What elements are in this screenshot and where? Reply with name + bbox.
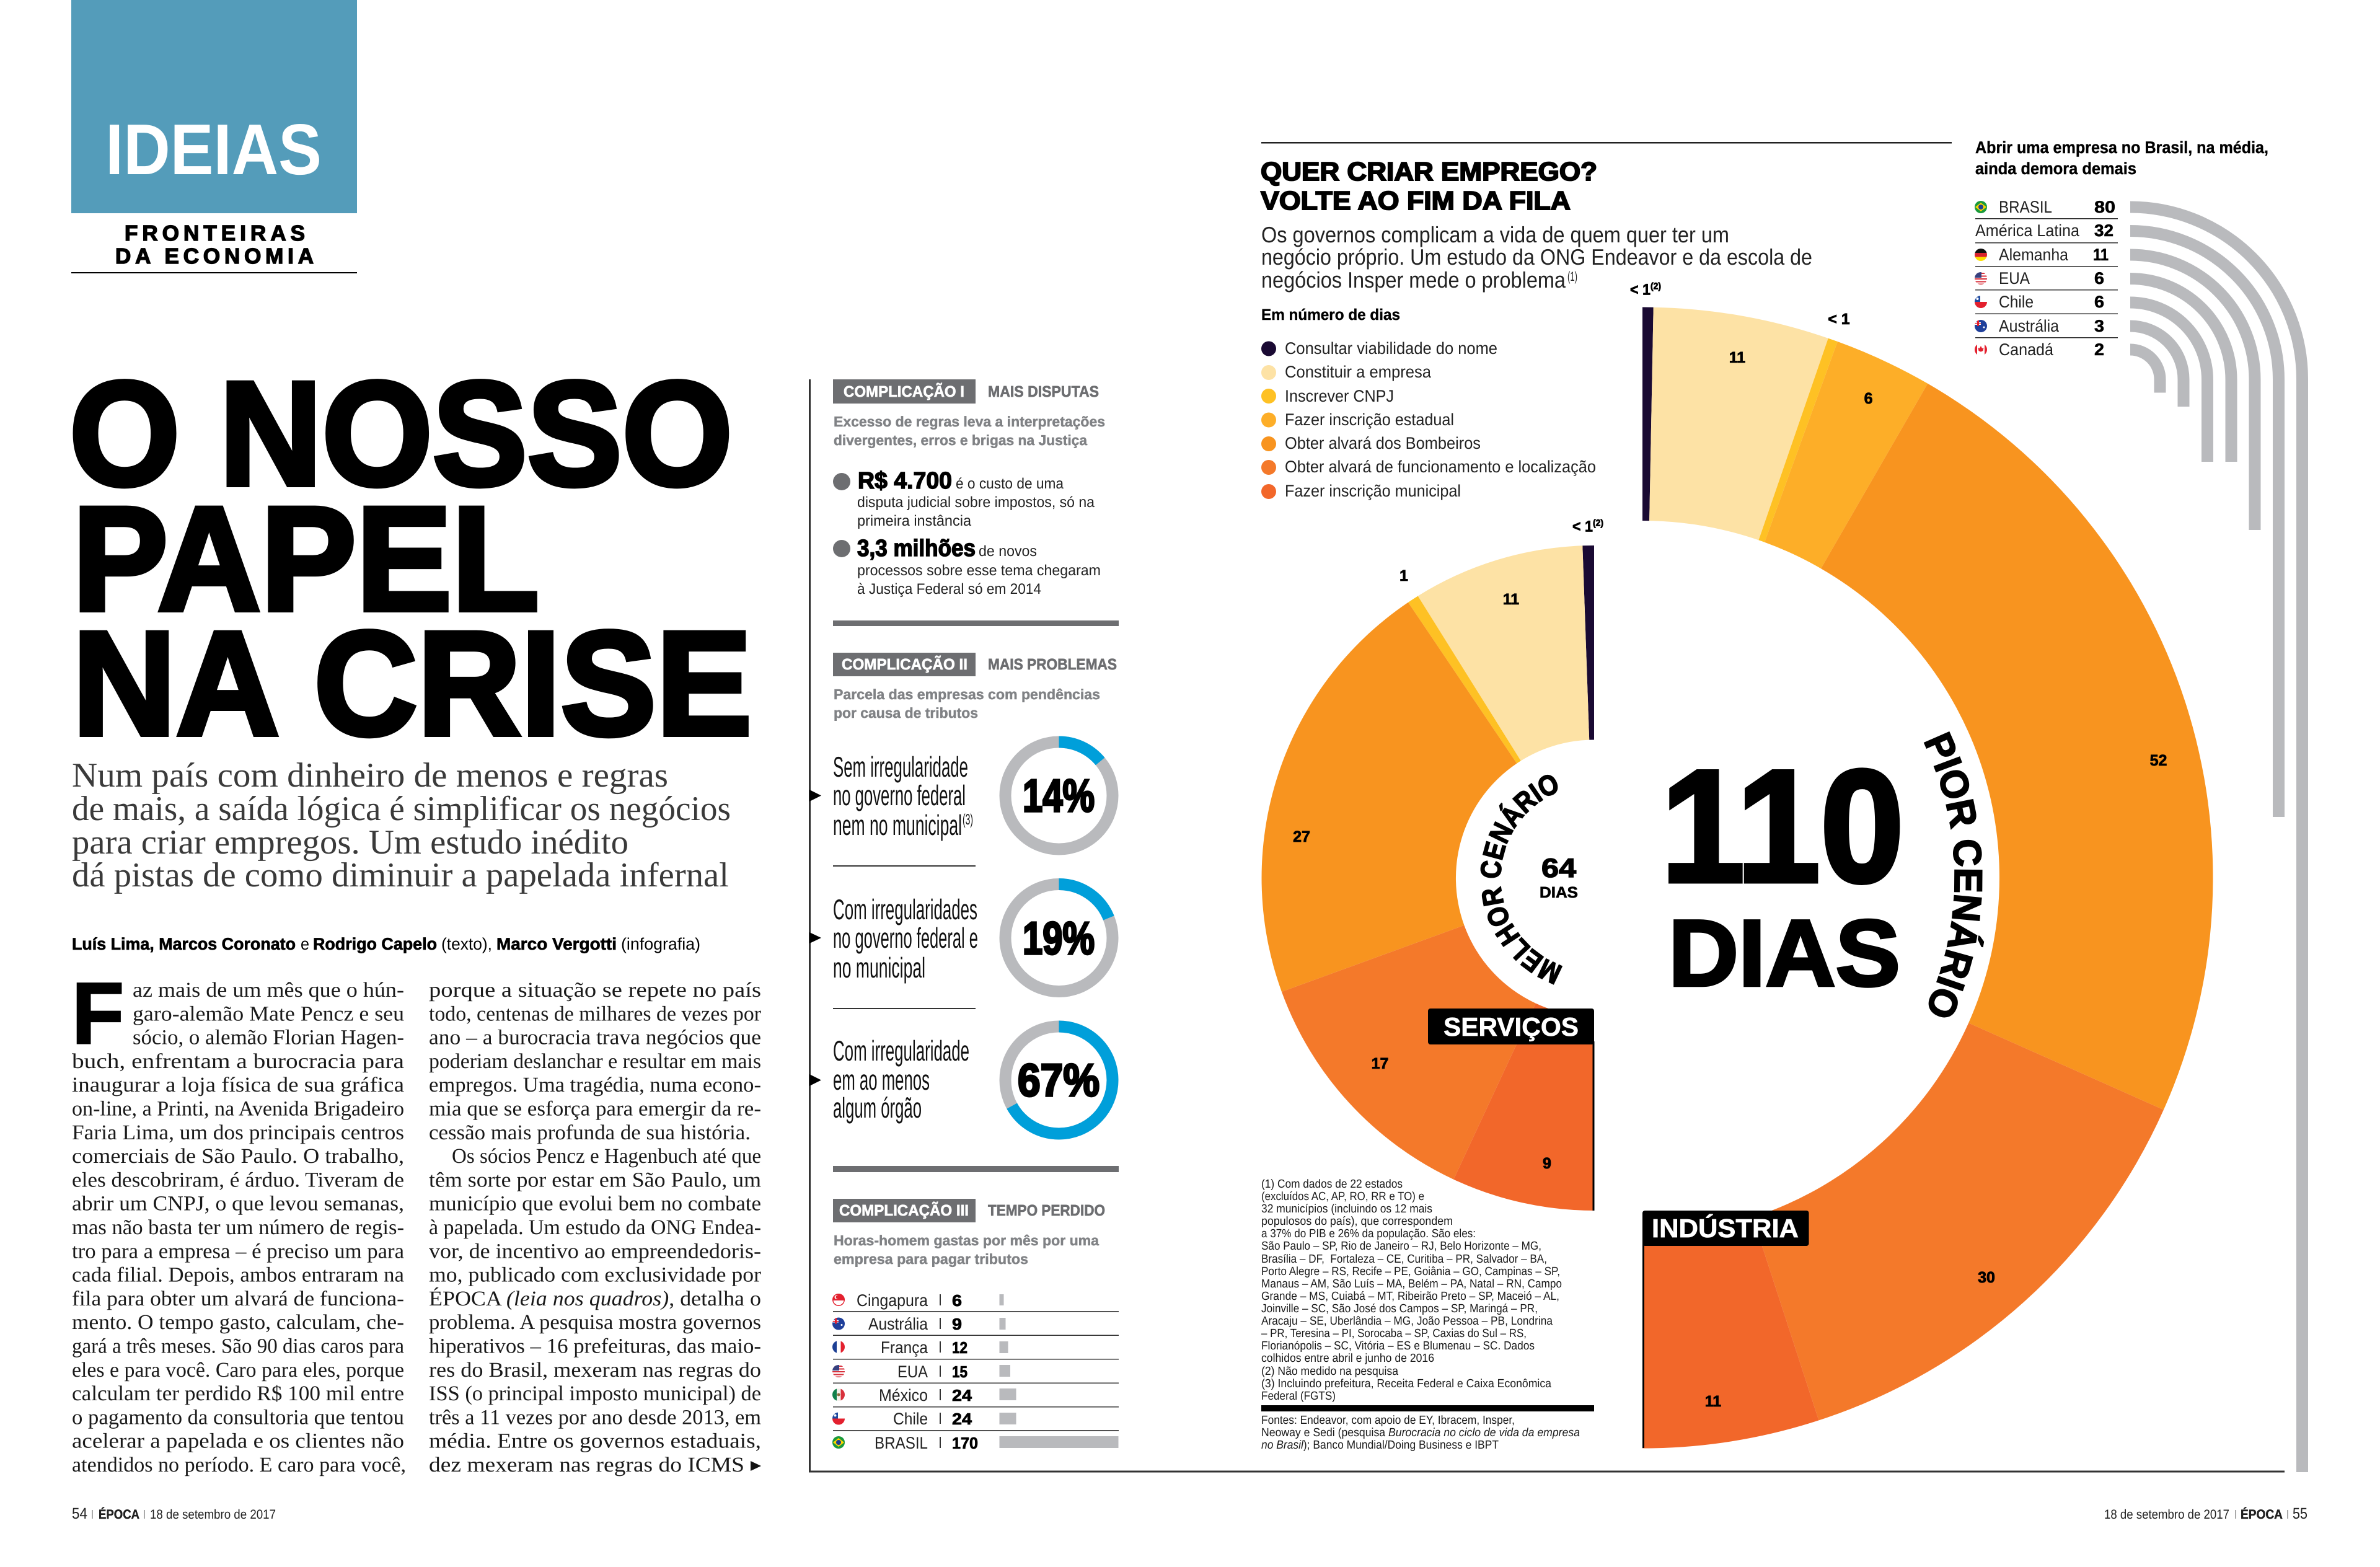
legend title: Em número de dias bbox=[1261, 306, 1400, 324]
center value: 110 dias bbox=[1661, 736, 1904, 1006]
sources bbox=[1261, 1414, 1580, 1452]
infographic description: negócio próprio. Um estudo da ONG Endeavor e da escola de bbox=[1261, 244, 1812, 270]
sources: Neoway e Sedi (pesquisa Burocracia no ciclo de vida da empresa bbox=[1261, 1426, 1580, 1439]
row: Canadá bbox=[1975, 340, 2104, 359]
row: 19%: 19% bbox=[1023, 912, 1095, 964]
byline bbox=[72, 935, 700, 953]
section subtitle: Fronteiras da Economia: DA ECONOMIA bbox=[115, 244, 314, 268]
best-case value labels: < 1 bbox=[1572, 518, 1594, 536]
row: Brasil: BRASIL bbox=[1999, 198, 2052, 216]
section subtitle: Fronteiras da Economia: FRONTEIRAS bbox=[125, 221, 305, 245]
title: PAPEL bbox=[73, 476, 539, 642]
row: 19% bbox=[809, 884, 1113, 992]
article text: column 2: vor, de incentivo ao empreendedoris- bbox=[429, 1240, 761, 1263]
row: EUA: 15 bbox=[952, 1362, 967, 1381]
article text: column 2: média. Entre os governos estaduais, bbox=[429, 1430, 761, 1453]
worst-case value labels: 11 bbox=[1705, 1393, 1721, 1410]
infographic heading: QUER CRIAR EMPREGO? bbox=[1261, 157, 1597, 186]
center value: 110 dias: 110 bbox=[1661, 736, 1904, 916]
stat: R$ 4.700: primeira instância bbox=[857, 513, 972, 529]
footnotes: Grande – MS, Cuiabá – MT, Ribeirão Preto – SP, Maceió – AL, bbox=[1261, 1290, 1559, 1303]
article text: column 1: atendidos no período. E caro para você, bbox=[72, 1454, 406, 1477]
row: América Latina: América Latina bbox=[1975, 221, 2080, 240]
label: Serviços bbox=[1428, 1009, 1594, 1211]
row: França: 12 bbox=[952, 1338, 967, 1357]
row: México: México bbox=[879, 1386, 928, 1405]
stat: 3,3 milhões: 3,3 milhões bbox=[857, 536, 976, 562]
row: EUA: EUA bbox=[897, 1362, 928, 1381]
section tag: Ideias bbox=[71, 0, 357, 213]
footnotes: a 37% do PIB e 26% da população. São eles: bbox=[1261, 1227, 1476, 1240]
row: Chile bbox=[832, 1410, 1016, 1428]
heading: tempo perdido: TEMPO PERDIDO bbox=[988, 1202, 1105, 1219]
best-case value labels: 1 bbox=[1399, 567, 1408, 585]
stat: R$ 4.700: é o custo de uma bbox=[956, 475, 1064, 492]
legend item: obter alvará dos bombeiros: Obter alvará dos Bombeiros bbox=[1285, 434, 1481, 452]
row: Canadá: 2 bbox=[2094, 340, 2104, 359]
legend item: inscrever CNPJ: Inscrever CNPJ bbox=[1285, 387, 1394, 405]
legend item: obter alvará de funcionamento: Obter alvará de funcionamento e localização bbox=[1285, 457, 1596, 476]
row: 67% bbox=[809, 1026, 1113, 1134]
center value: 64 dias: DIAS bbox=[1540, 884, 1578, 901]
infographic description: Os governos complicam a vida de quem quer ter um bbox=[1261, 222, 1729, 247]
article text: column 1: eles descobriram, é árduo. Tiveram de bbox=[72, 1168, 404, 1191]
footnotes: Joinville – SC, São José dos Campos – SP, Maringá – PR, bbox=[1261, 1302, 1538, 1315]
footer: page 55: 18 de setembro de 2017 bbox=[2104, 1507, 2229, 1522]
article text: column 2: município que evolui bem no combate bbox=[429, 1193, 761, 1216]
article text: column 1 bbox=[72, 979, 406, 1477]
footnotes: Florianópolis – SC, Vitória – ES e Blumenau – SC. Dados bbox=[1261, 1340, 1535, 1353]
sources: Fontes: Endeavor, com apoio de EY, Ibracem, Insper, bbox=[1261, 1414, 1515, 1427]
worst-case value labels: 6 bbox=[1864, 390, 1873, 407]
description: por causa de tributos bbox=[834, 705, 978, 721]
best-case value labels: 27 bbox=[1293, 828, 1310, 845]
footnotes: populosos do país), que correspondem bbox=[1261, 1215, 1453, 1228]
row: Cingapura: 6 bbox=[952, 1291, 962, 1310]
byline: e bbox=[301, 935, 309, 953]
row: Austrália: 3 bbox=[2094, 317, 2104, 335]
subheading: de mais, a saída lógica é simplificar os negócios bbox=[72, 790, 731, 828]
article text: column 1: comerciais de São Paulo. O trabalho, bbox=[72, 1145, 404, 1168]
worst-case value labels: < 1 bbox=[1828, 311, 1850, 328]
section subtitle: Fronteiras da Economia bbox=[71, 221, 357, 273]
worst-case value labels bbox=[1630, 281, 2167, 1410]
stat: R$ 4.700 bbox=[833, 468, 1095, 529]
article text: column 2: cessão mais profunda de sua história. bbox=[429, 1121, 751, 1144]
panel: complicação III bbox=[832, 1199, 1119, 1452]
row: França: França bbox=[881, 1338, 928, 1357]
footnotes: colhidos entre abril e junho de 2016 bbox=[1261, 1352, 1434, 1365]
title: O NOSSO bbox=[69, 351, 733, 516]
icon: end-of-column arrow bbox=[751, 1461, 761, 1471]
tag: complicação I: COMPLICAÇÃO I bbox=[844, 382, 964, 400]
article text: column 1: calculam ter perdido R$ 100 mil entre bbox=[72, 1382, 404, 1405]
row: Cingapura bbox=[832, 1291, 1004, 1310]
footnotes: 32 municípios (incluindo os 12 mais bbox=[1261, 1203, 1432, 1216]
description bbox=[834, 1232, 1099, 1267]
footnotes bbox=[1261, 1178, 1562, 1403]
legend item: fazer inscrição municipal: Fazer inscrição municipal bbox=[1285, 482, 1461, 500]
article text: column 1: cada filial. Depois, ambos entraram na bbox=[72, 1264, 404, 1287]
sources: no Brasil); Banco Mundial/Doing Business e IBPT bbox=[1261, 1439, 1499, 1452]
description: Horas-homem gastas por mês por uma bbox=[834, 1232, 1099, 1248]
stat: R$ 4.700: R$ 4.700 bbox=[858, 468, 952, 494]
article text: column 1: tro para a empresa – é preciso um para bbox=[72, 1240, 404, 1263]
row: 14%: nem no municipal bbox=[833, 809, 962, 841]
footnotes: (excluídos AC, AP, RO, RR e TO) e bbox=[1261, 1190, 1424, 1203]
curved label: melhor cenário: MELHOR CENÁRIO bbox=[1480, 775, 1563, 985]
title: NA CRISE bbox=[73, 601, 752, 766]
byline: Marco Vergotti bbox=[496, 935, 617, 953]
row: Austrália: 9 bbox=[952, 1315, 962, 1333]
footnotes: Brasília – DF, Fortaleza – CE, Curitiba – PR, Salvador – BA, bbox=[1261, 1253, 1547, 1266]
row: 19%: Com irregularidades bbox=[833, 893, 977, 925]
footer: page 55 bbox=[2104, 1505, 2307, 1522]
row: México: 24 bbox=[952, 1386, 972, 1405]
footer: page 55: 55 bbox=[2293, 1505, 2307, 1522]
best-case value labels: 9 bbox=[1543, 1155, 1551, 1172]
footnotes: (1) Com dados de 22 estados bbox=[1261, 1178, 1403, 1191]
stat: 3,3 milhões: de novos bbox=[979, 543, 1037, 560]
chart: best-case half donut (64 days) bbox=[1262, 545, 1594, 1211]
row: Alemanha: 11 bbox=[2093, 245, 2109, 264]
stat: R$ 4.700: disputa judicial sobre impostos, só na bbox=[857, 494, 1095, 511]
row: Alemanha bbox=[1975, 245, 2109, 264]
row: Alemanha: Alemanha bbox=[1999, 245, 2069, 264]
stat: 3,3 milhões: à Justiça Federal só em 2014 bbox=[857, 581, 1041, 598]
description bbox=[834, 413, 1105, 448]
article text: column 2: têm sorte por estar em São Paulo, um bbox=[429, 1168, 761, 1191]
row: Brasil: BRASIL bbox=[875, 1434, 928, 1452]
heading: mais problemas: MAIS PROBLEMAS bbox=[988, 656, 1117, 673]
row: Austrália: Austrália bbox=[1999, 317, 2060, 335]
article text: column 1: abrir um CNPJ, o que levou semanas, bbox=[72, 1193, 404, 1216]
row: Chile: 6 bbox=[2094, 293, 2104, 311]
row: EUA: 6 bbox=[2094, 269, 2104, 288]
article text: column 2: res do Brasil, mexeram nas regras do bbox=[429, 1359, 761, 1382]
byline: Rodrigo Capelo bbox=[313, 935, 437, 953]
row: 14%: (3) bbox=[963, 811, 973, 828]
article text: column 1: fila para obter um alvará de funciona- bbox=[72, 1287, 404, 1310]
row: Chile: 24 bbox=[952, 1410, 972, 1428]
article text: column 2: ÉPOCA (leia nos quadros) , detalha o bbox=[429, 1287, 761, 1310]
worst-case value labels: 52 bbox=[2150, 752, 2167, 769]
stat: 3,3 milhões: processos sobre esse tema chegaram bbox=[857, 562, 1101, 579]
article text: column 2 bbox=[429, 979, 762, 1477]
row: França bbox=[832, 1338, 1008, 1357]
row: 19%: no municipal bbox=[833, 951, 925, 984]
row: 67%: algum órgão bbox=[833, 1092, 922, 1124]
stat: 3,3 milhões bbox=[833, 536, 1101, 598]
worst-case value labels: 30 bbox=[1978, 1269, 1995, 1286]
tag: complicação III: COMPLICAÇÃO III bbox=[839, 1201, 969, 1219]
row: 67%: Com irregularidade bbox=[833, 1035, 969, 1067]
panel: complicação I bbox=[833, 379, 1105, 598]
bar chart: hours per month by country bbox=[832, 1291, 1119, 1452]
row: Chile: Chile bbox=[893, 1410, 928, 1428]
byline: (infografia) bbox=[621, 935, 700, 953]
article text: column 1: buch, enfrentam a burocracia para bbox=[72, 1050, 404, 1073]
footer: page 54: 54 bbox=[72, 1505, 87, 1522]
article text: column 1: eles e para você. Caro para eles, porque bbox=[72, 1359, 404, 1382]
center value: 110 dias: DIAS bbox=[1668, 901, 1900, 1006]
tag: complicação III bbox=[833, 1199, 976, 1222]
row: Canadá: Canadá bbox=[1999, 340, 2054, 359]
subheading: Num país com dinheiro de menos e regras bbox=[72, 756, 668, 795]
byline: (texto), bbox=[441, 935, 492, 953]
article text: column 2: todo, centenas de milhares de vezes por bbox=[429, 1002, 762, 1025]
footer: page 54: 18 de setembro de 2017 bbox=[150, 1507, 276, 1522]
row: 67%: em ao menos bbox=[833, 1064, 930, 1096]
heading: mais disputas: MAIS DISPUTAS bbox=[988, 383, 1099, 400]
frame rule around the infographic bbox=[809, 379, 2285, 1472]
article text: column 1: o pagamento da consultoria que tentou bbox=[72, 1406, 404, 1429]
row: Brasil: 80 bbox=[2094, 198, 2115, 216]
row: Austrália bbox=[1975, 317, 2104, 335]
row: México bbox=[832, 1386, 1016, 1405]
article text: column 2: ISS (o principal imposto municipal) de bbox=[429, 1382, 761, 1405]
footer: page 54 bbox=[72, 1505, 276, 1522]
description bbox=[834, 686, 1100, 721]
tag: complicação I bbox=[833, 379, 976, 404]
article text: column 2: Os sócios Pencz e Hagenbuch até que bbox=[452, 1145, 761, 1168]
panel heading: ainda demora demais bbox=[1975, 159, 2136, 178]
tag: complicação II bbox=[833, 653, 976, 676]
row: EUA bbox=[832, 1362, 1010, 1381]
article text: column 2: porque a situação se repete no país bbox=[429, 979, 761, 1002]
panel: average days to open a business bbox=[1975, 138, 2302, 1472]
label: Indústria: INDÚSTRIA bbox=[1652, 1214, 1799, 1243]
infographic heading bbox=[1261, 157, 1597, 215]
article text: column 1: inaugurar a loja física de sua gráfica bbox=[72, 1074, 404, 1097]
article text: column 2: hiperativos – 16 prefeituras, das maio- bbox=[429, 1335, 761, 1357]
label: Serviços: SERVIÇOS bbox=[1443, 1012, 1579, 1041]
infographic description: (1) bbox=[1567, 270, 1577, 284]
row: 14%: Sem irregularidade bbox=[833, 751, 968, 783]
worst-case value labels: (2) bbox=[1651, 281, 1661, 291]
article text: column 1: mas não basta ter um número de regis- bbox=[72, 1216, 404, 1239]
row: 19%: no governo federal e bbox=[833, 922, 978, 954]
infographic description bbox=[1261, 222, 1812, 293]
article text: column 1: mento. O tempo gasto, calculam, che- bbox=[72, 1311, 404, 1334]
worst-case value labels: 11 bbox=[1729, 349, 1745, 366]
byline: Luís Lima, Marcos Coronato bbox=[72, 935, 296, 953]
label: Indústria bbox=[1642, 1211, 1809, 1448]
row: América Latina: 32 bbox=[2094, 221, 2113, 240]
row: Austrália: Austrália bbox=[868, 1315, 928, 1333]
chart: worst-case half donut (110 days) bbox=[1642, 307, 2213, 1448]
footnotes: (2) Não medido na pesquisa bbox=[1261, 1365, 1398, 1378]
description: Excesso de regras leva a interpretações bbox=[834, 413, 1105, 430]
tag: complicação II: COMPLICAÇÃO II bbox=[842, 655, 967, 673]
curved label: pior cenário: PIOR CENÁRIO bbox=[1924, 731, 1985, 1018]
row: EUA: EUA bbox=[1999, 269, 2030, 288]
best-case value labels bbox=[1293, 518, 1603, 1172]
row: Brasil bbox=[1975, 198, 2115, 216]
footnotes: Aracaju – SE, Uberlândia – MG, João Pessoa – PB, Londrina bbox=[1261, 1315, 1553, 1328]
best-case value labels: (2) bbox=[1593, 518, 1603, 528]
article text: column 2: poderiam deslanchar e resultar em mais bbox=[429, 1050, 761, 1073]
footnotes: São Paulo – SP, Rio de Janeiro – RJ, Belo Horizonte – MG, bbox=[1261, 1240, 1541, 1253]
section tag: Ideias: IDEIAS bbox=[105, 109, 322, 190]
row: 14% bbox=[809, 742, 1113, 849]
footer: page 55: ÉPOCA bbox=[2241, 1507, 2283, 1522]
article text: column 1: on-line, a Printi, na Avenida Brigadeiro bbox=[72, 1097, 404, 1121]
article text: column 1: sócio, o alemão Florian Hagen- bbox=[133, 1026, 404, 1049]
description: empresa para pagar tributos bbox=[834, 1251, 1028, 1267]
footnotes: Manaus – AM, São Luís – MA, Belém – PA, Natal – RN, Campo bbox=[1261, 1278, 1562, 1291]
article text: column 2: dez mexeram nas regras do ICMS bbox=[429, 1454, 744, 1477]
description: Parcela das empresas com pendências bbox=[834, 686, 1100, 702]
subheading: dá pistas de como diminuir a papelada infernal bbox=[72, 856, 729, 894]
row: Brasil bbox=[832, 1434, 1118, 1452]
best-case value labels: 11 bbox=[1503, 591, 1519, 608]
row: EUA bbox=[1975, 269, 2104, 288]
article text: column 2: três a 11 vezes por ano desde 2013, em bbox=[429, 1406, 761, 1429]
row: 67%: 67% bbox=[1018, 1054, 1100, 1106]
subheading: para criar empregos. Um estudo inédito bbox=[72, 823, 628, 862]
article text: column 2: ano – a burocracia trava negócios que bbox=[429, 1026, 761, 1049]
center value: 64 dias: 64 bbox=[1541, 854, 1576, 883]
best-case value labels: 17 bbox=[1372, 1055, 1388, 1072]
panel: complicação II bbox=[809, 653, 1117, 1134]
worst-case value labels: < 1 bbox=[1630, 281, 1652, 299]
footnotes: Federal (FGTS) bbox=[1261, 1390, 1336, 1403]
row: 14%: 14% bbox=[1023, 770, 1095, 821]
article text: column 1: gará a três meses. São 90 dias caros para bbox=[72, 1335, 404, 1357]
row: Brasil: 170 bbox=[952, 1434, 978, 1452]
row: Cingapura: Cingapura bbox=[857, 1291, 928, 1310]
article text: column 1: garo-alemão Mate Pencz e seu bbox=[133, 1002, 404, 1025]
article text: column 2: à papelada. Um estudo da ONG Endea- bbox=[429, 1216, 761, 1239]
row: Chile bbox=[1975, 293, 2104, 311]
row: Chile: Chile bbox=[1999, 293, 2034, 311]
subheading bbox=[72, 756, 731, 894]
title bbox=[69, 351, 752, 766]
panel heading: Abrir uma empresa no Brasil, na média, bbox=[1975, 138, 2268, 157]
row: 14%: no governo federal bbox=[833, 779, 966, 811]
legend item: fazer inscrição estadual: Fazer inscrição estadual bbox=[1285, 410, 1454, 429]
infographic heading: VOLTE AO FIM DA FILA bbox=[1261, 186, 1571, 215]
article text: column 2: mia que se esforça para emergir da re- bbox=[429, 1097, 761, 1121]
article text: column 1: az mais de um mês que o hún- bbox=[133, 979, 404, 1002]
article text: column 2: empregos. Uma tragédia, numa econo- bbox=[429, 1074, 761, 1097]
center value: 64 dias bbox=[1540, 854, 1578, 901]
chart: bent bars by country bbox=[2130, 207, 2302, 1472]
infographic description: negócios Insper mede o problema bbox=[1261, 267, 1566, 293]
footer: page 54: ÉPOCA bbox=[99, 1507, 139, 1522]
legend bbox=[1261, 306, 1596, 500]
description: divergentes, erros e brigas na Justiça bbox=[834, 432, 1087, 448]
footnotes: Porto Alegre – RS, Recife – PE, Goiânia – GO, Campinas – SP, bbox=[1261, 1265, 1560, 1278]
footnotes: – PR, Teresina – PI, Sorocaba – SP, Caxias do Sul – RS, bbox=[1261, 1327, 1527, 1340]
article text: column 1: Faria Lima, um dos principais centros bbox=[72, 1121, 404, 1144]
drop cap: F bbox=[72, 964, 124, 1062]
article text: column 1: acelerar a papelada e os clientes não bbox=[72, 1430, 404, 1453]
article text: column 2: mo, publicado com exclusividade por bbox=[429, 1264, 762, 1287]
article text: column 2: problema. A pesquisa mostra governos bbox=[429, 1311, 761, 1334]
row: Austrália bbox=[832, 1315, 1005, 1333]
panel heading bbox=[1975, 138, 2268, 178]
legend item: consultar viabilidade do nome: Consultar viabilidade do nome bbox=[1285, 339, 1497, 358]
legend item: constituir a empresa: Constituir a empresa bbox=[1285, 363, 1432, 381]
footnotes: (3) Incluindo prefeitura, Receita Federal e Caixa Econômica bbox=[1261, 1377, 1551, 1390]
